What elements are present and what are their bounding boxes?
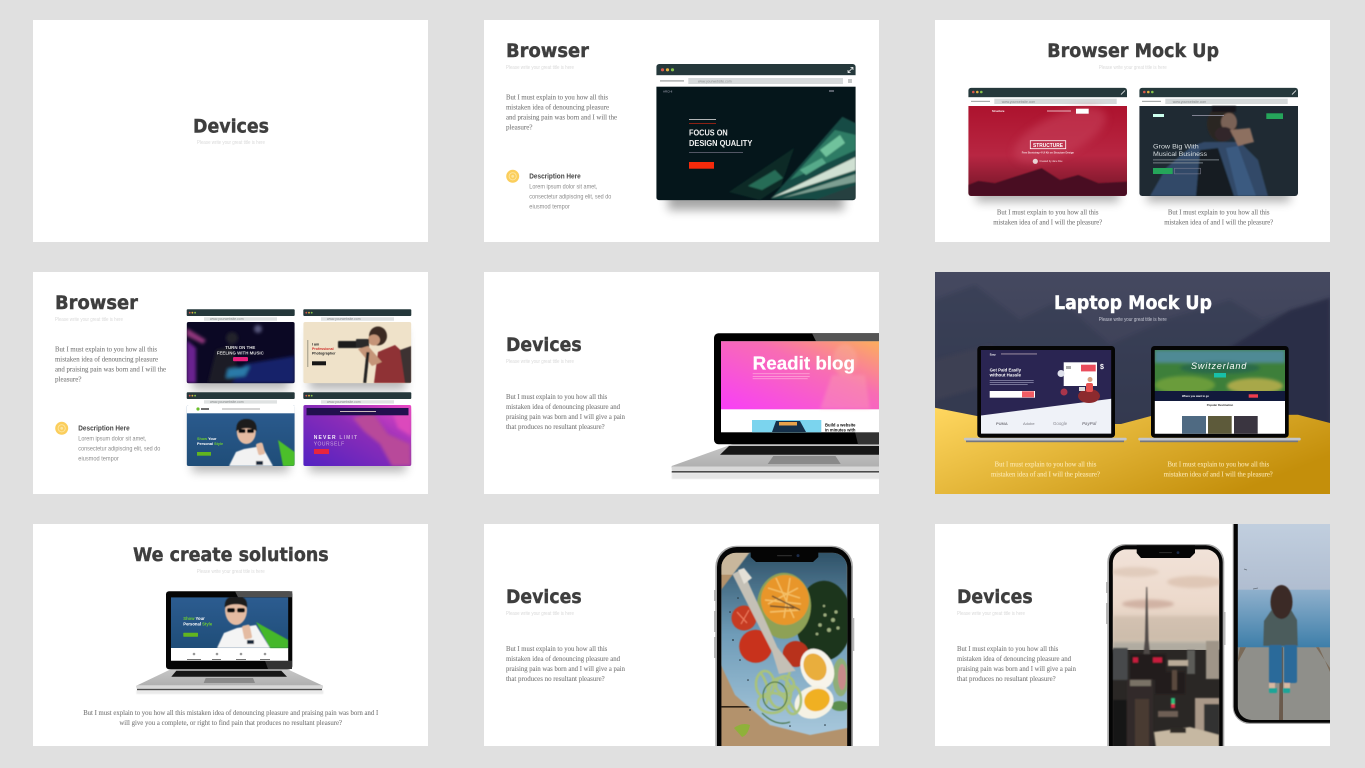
panel: Laptop Mock Up — [935, 272, 1330, 494]
body text: that produces no resultant pleasure? — [957, 674, 1056, 683]
panel: Browser single mock — [484, 20, 879, 242]
laptop: personal style: Personal Style — [183, 622, 213, 626]
laptop: get paid easily: Get Paid Easily — [990, 368, 1022, 373]
body text: mistaken idea of denouncing pleasure and — [506, 402, 620, 411]
laptop: get paid easily: Google — [1053, 421, 1068, 426]
subtitle: Please write your great title is here — [506, 611, 574, 617]
description: Description Here — [529, 173, 581, 180]
browser page: DJ turn on the feeling with music — [187, 322, 295, 383]
phone: person at sea — [1232, 524, 1330, 724]
browser page: never limit yourself: YOURSELF — [314, 442, 345, 448]
laptop: Readit blog: Readit blog — [753, 353, 855, 373]
body text: that produces no resultant pleasure? — [506, 422, 605, 431]
body text: mistaken idea of denouncing pleasure — [506, 102, 610, 112]
description: Description Here — [78, 425, 130, 432]
browser chrome: DJ: www.yourwebsite.com — [210, 317, 244, 321]
body text: mistaken idea of denouncing pleasure and — [957, 654, 1071, 663]
caption left: But I must explain to you how all this — [997, 208, 1099, 216]
browser mock: musical business: Grow Big With — [1153, 145, 1199, 151]
body text: mistaken idea of denouncing pleasure — [55, 354, 159, 364]
panel: We create solutions — [33, 524, 428, 746]
body text: But I must explain to you how all this — [506, 644, 607, 653]
browser page: DJ turn on the feeling with music: TURN ON THE — [225, 345, 255, 350]
body text: But I must explain to you how all this — [957, 644, 1058, 653]
heading: Devices: Devices — [193, 116, 269, 138]
caption right: But I must explain to you how all this — [1167, 460, 1269, 468]
browser mock: Focus on design quality: DESIGN QUALITY — [689, 138, 753, 148]
description: eiusmod tempor — [78, 456, 119, 462]
laptop: Switzerland: Where you want to go — [1182, 394, 1209, 398]
mountain background — [938, 286, 1330, 422]
heading: Browser: Browser — [506, 40, 590, 62]
browser page: professional photographer: I am — [312, 342, 319, 346]
browser mock: musical business: www.yourwebsite.com — [1173, 100, 1206, 104]
browser page: professional photographer — [303, 322, 411, 383]
subtitle: Please write your great title is here — [197, 569, 265, 575]
browser mock: Focus on design quality: ARCHI — [663, 90, 673, 94]
browser chrome: never limit — [303, 392, 411, 405]
heading: Browser Mock Up — [1047, 40, 1219, 62]
laptop: get paid easily — [964, 346, 1127, 442]
browser shadows — [192, 330, 406, 472]
caption right — [1164, 460, 1273, 478]
subtitle: Please write your great title is here — [506, 65, 574, 71]
laptop: get paid easily: PUMA — [996, 421, 1008, 426]
browser chrome: photographer: www.yourwebsite.com — [327, 317, 361, 321]
body text: But I must explain to you how all this — [506, 92, 608, 102]
browser chrome: personal style — [187, 392, 295, 405]
subtitle: Please write your great title is here — [1099, 317, 1167, 323]
body text: pleasure? — [506, 122, 533, 132]
laptop: Switzerland — [1138, 346, 1301, 442]
subtitle: Please write your great title is here — [55, 317, 123, 323]
browser mock: structure red: Structure — [992, 109, 1005, 113]
heading: Laptop Mock Up — [1054, 292, 1212, 314]
subtitle: Please write your great title is here — [1099, 65, 1167, 71]
panel: Devices two phones — [935, 524, 1330, 746]
body text: But I must explain to you how all this — [506, 392, 607, 401]
body text — [55, 344, 167, 384]
caption right — [1164, 208, 1274, 226]
body text: and praising pain was born and I will the — [506, 112, 618, 122]
body text: But I must explain to you how all this — [55, 344, 157, 354]
laptop: get paid easily: $ — [1100, 364, 1104, 371]
browser page: show your personal style — [187, 405, 295, 466]
laptop: Switzerland: Switzerland — [1191, 361, 1247, 371]
subtitle: Please write your great title is here — [957, 611, 1025, 617]
browser chrome: DJ — [187, 309, 295, 322]
description: Lorem ipsum dolor sit amet, — [529, 184, 598, 190]
caption right: mistaken idea of and I will the pleasure? — [1164, 470, 1273, 478]
browser page: show your personal style: Show Your — [197, 437, 217, 441]
laptop: personal style — [136, 591, 323, 694]
laptop: Readit blog: Build a website — [825, 423, 856, 428]
heading: Devices: Devices — [506, 334, 582, 356]
laptop: get paid easily: without Hassle — [989, 373, 1022, 378]
laptop: Switzerland: Popular Destination — [1207, 403, 1233, 407]
laptop: get paid easily: Adobe — [1023, 421, 1035, 426]
caption left — [993, 208, 1103, 226]
subtitle: Please write your great title is here — [506, 359, 574, 365]
browser page: DJ turn on the feeling with music: FEELING WITH MUSIC — [217, 350, 265, 356]
browser mock: structure red: Free Bootstrap 4 UI Kit on Structure Design — [1022, 151, 1074, 155]
description: Lorem ipsum dolor sit amet, — [78, 436, 147, 442]
browser chrome: personal style: www.yourwebsite.com — [210, 400, 244, 404]
laptop: get paid easily: PayPal — [1082, 421, 1097, 426]
browser shadow — [668, 90, 844, 210]
heading: Devices: Devices — [506, 586, 582, 608]
body text — [506, 92, 618, 132]
browser page: show your personal style: Personal Style — [197, 442, 223, 446]
body text: praising pain was born and I will give a pain — [506, 412, 625, 421]
phone: food photo — [714, 546, 854, 768]
body text — [506, 392, 625, 431]
panel: Devices laptop — [484, 272, 884, 494]
description: eiusmod tempor — [529, 204, 570, 210]
browser mock: musical business: Musical Business — [1153, 152, 1207, 158]
browser mock: structure red: www.yourwebsite.com — [1002, 100, 1035, 104]
browser page: never limit yourself — [303, 405, 411, 466]
browser shadows — [976, 110, 1290, 202]
subtitle: Please write your great title is here — [197, 140, 265, 146]
body text: will give you a complete, or right to find pain that produces no resultant pleasure? — [119, 718, 343, 727]
browser mock: Focus on design quality: www.yourwebsite.com — [698, 80, 732, 84]
body text: But I must explain to you how all this mistaken idea of denouncing pleasure and praising pain was born and I — [83, 708, 379, 717]
body text: praising pain was born and I will give a pain — [506, 664, 625, 673]
panel: Devices phone food — [484, 524, 879, 768]
browser mock: Focus on design quality: FOCUS ON — [689, 127, 728, 137]
browser page: never limit yourself: NEVER LIMIT — [314, 435, 358, 441]
browser mock: Focus on design quality — [656, 64, 856, 200]
panel: Browser Mock Up two browsers — [935, 20, 1330, 242]
caption left — [991, 460, 1101, 478]
panel: Browser four mocks — [33, 272, 428, 494]
body text — [506, 644, 625, 683]
description — [78, 425, 161, 462]
panel: title slide Devices — [33, 20, 428, 242]
body text: pleasure? — [55, 374, 82, 384]
browser mock: structure red: Created by Jane Doe — [1040, 160, 1063, 163]
browser mock: musical business — [1139, 88, 1298, 196]
caption right: But I must explain to you how all this — [1168, 208, 1270, 216]
body text: praising pain was born and I will give a pain — [957, 664, 1076, 673]
icon: yellow target — [55, 422, 68, 435]
laptop: get paid easily: Easy — [990, 353, 996, 357]
browser page: professional photographer: Professional — [312, 347, 334, 351]
browser mock: structure red — [968, 88, 1127, 196]
body text: that produces no resultant pleasure? — [506, 674, 605, 683]
heading: Devices: Devices — [957, 586, 1033, 608]
icon: yellow target — [506, 170, 519, 183]
browser page: professional photographer: Photographer — [312, 352, 336, 356]
yellow wave — [935, 408, 1330, 494]
body text — [83, 708, 379, 727]
body text — [957, 644, 1076, 683]
body text: mistaken idea of denouncing pleasure and — [506, 654, 620, 663]
browser chrome: photographer — [303, 309, 411, 322]
description — [529, 173, 612, 210]
caption left: But I must explain to you how all this — [995, 460, 1096, 468]
laptop: personal style: Show Your — [183, 616, 205, 621]
caption left: mistaken idea of and I will the pleasure? — [993, 218, 1103, 226]
body text: and praising pain was born and I will the — [55, 364, 167, 374]
browser mock: structure red: STRUCTURE — [1033, 143, 1064, 149]
description: consectetur adipiscing elit, sed do — [78, 446, 161, 452]
heading: We create solutions — [133, 544, 329, 566]
caption left: mistaken idea of and I will the pleasure? — [991, 470, 1101, 478]
heading: Browser: Browser — [55, 292, 139, 314]
description: consectetur adipiscing elit, sed do — [529, 194, 612, 200]
laptop: Readit blog — [672, 333, 884, 479]
phone: city skyline — [1106, 544, 1226, 768]
laptop: Readit blog: in minutes with — [825, 427, 856, 432]
caption right: mistaken idea of and I will the pleasure? — [1164, 218, 1274, 226]
browser chrome: never limit: www.yourwebsite.com — [327, 400, 361, 404]
